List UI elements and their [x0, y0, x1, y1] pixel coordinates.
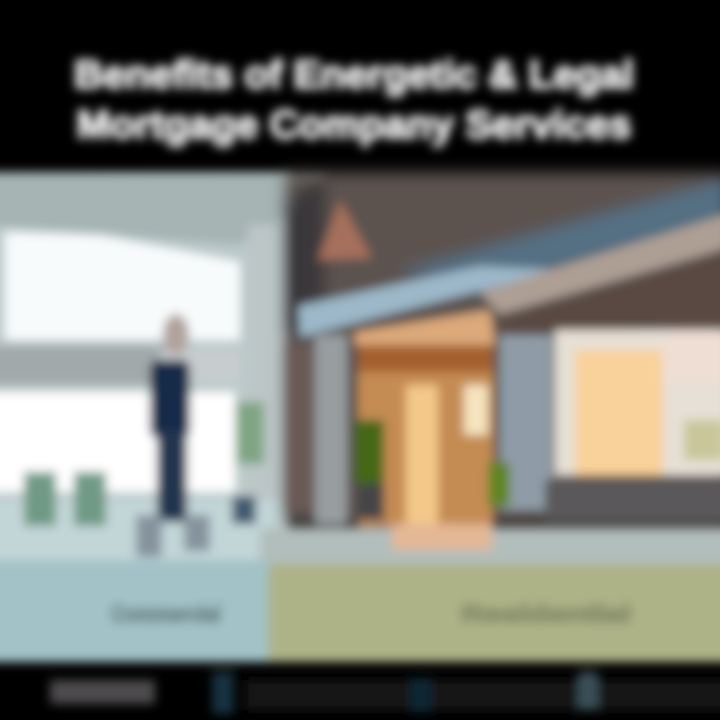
footer label	[50, 680, 155, 704]
right caption text: Residential	[461, 601, 631, 628]
left office interior	[0, 172, 328, 576]
footer icon 2	[410, 678, 432, 712]
footer icon 3	[578, 672, 598, 710]
person	[136, 314, 210, 557]
footer bar	[50, 672, 720, 714]
plants in office	[24, 402, 264, 526]
house door and window highlights	[406, 332, 720, 530]
illustration and captions	[0, 172, 720, 714]
illustration: office and house photo	[0, 172, 720, 578]
title: Benefits of Energetic & Legal	[74, 53, 634, 97]
house plants	[354, 420, 510, 520]
footer dark strip	[245, 680, 720, 710]
left caption text: Commercial	[111, 601, 221, 628]
title: Mortgage Company Services	[76, 103, 632, 147]
title	[74, 53, 634, 147]
panel: left caption	[0, 560, 270, 662]
ground strip	[260, 524, 720, 578]
footer icon 1	[212, 672, 234, 714]
panel: right caption	[268, 564, 720, 662]
house exterior	[285, 172, 720, 526]
house roof and walls	[285, 200, 720, 527]
